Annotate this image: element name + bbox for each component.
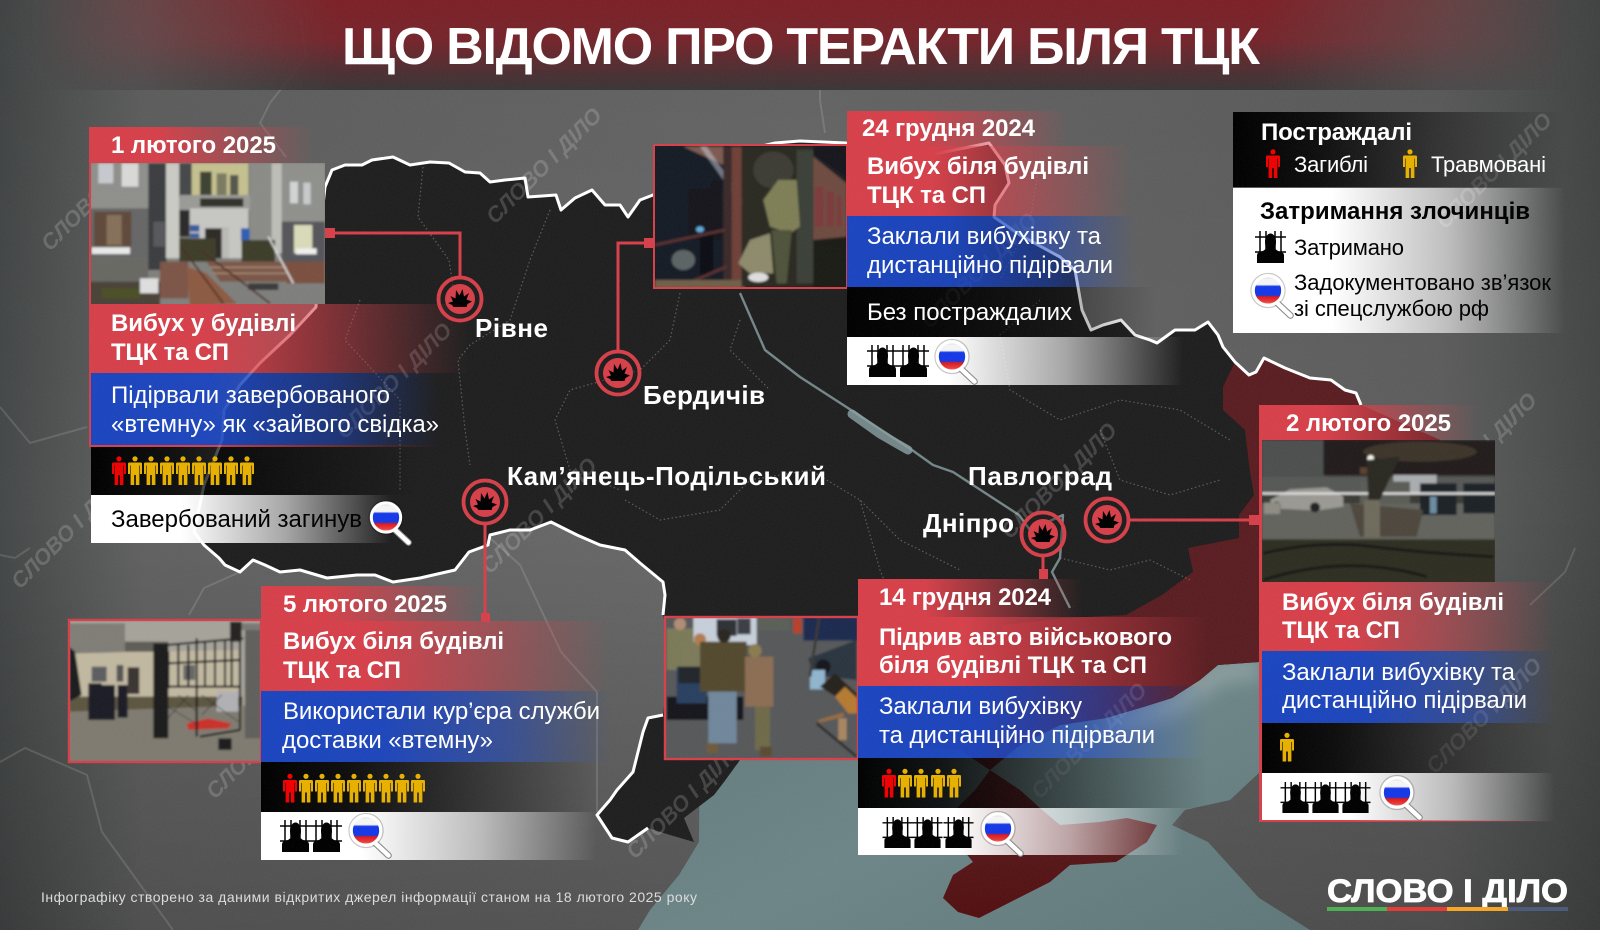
- watermarks: СЛОВО І ДІЛО: [1416, 388, 1542, 514]
- title: ЩО ВІДОМО ПРО ТЕРАКТИ БІЛЯ ТЦК: [342, 18, 1260, 76]
- legend item: injured: [1403, 149, 1546, 178]
- icon: Russia link magnifier: [935, 339, 974, 382]
- casualties: 1 killed, 4 injured: [882, 769, 961, 798]
- headline: [867, 153, 1089, 209]
- legend item: Russia link: Задокументовано зв’язок: [1294, 270, 1551, 295]
- watermarks: СЛОВО І ДІЛО: [916, 208, 1042, 334]
- headline: Вибух біля будівлі: [283, 628, 504, 655]
- casualties: 1 injured: [1280, 733, 1294, 762]
- casualties text: Без постраждалих: [867, 299, 1072, 326]
- headline: [879, 624, 1172, 679]
- marker: Berdychiv: [596, 352, 765, 410]
- Crimea: [930, 770, 1157, 918]
- panel: 1 February 2025 Rivne: [89, 127, 469, 543]
- label: Kamianets-Podilskyi: Кам’янець-Подільський: [507, 461, 826, 491]
- watermarks: СЛОВО І ДІЛО: [1421, 653, 1547, 779]
- method: «втемну» як «зайвого свідка»: [111, 411, 439, 438]
- method: Заклали вибухівку та: [867, 223, 1102, 250]
- leader end squares: [325, 228, 1260, 622]
- legend item: detained: Затримано: [1294, 235, 1404, 260]
- headline: Вибух біля будівлі: [1282, 589, 1504, 616]
- label: Dnipro: Дніпро: [923, 508, 1014, 538]
- headline: Вибух у будівлі: [111, 310, 296, 337]
- legend item: killed: [1266, 149, 1368, 178]
- headline: [283, 628, 504, 684]
- headline: ТЦК та СП: [867, 182, 986, 209]
- watermarks: СЛОВО І ДІЛО: [36, 130, 162, 256]
- label: Rivne: Рівне: [475, 313, 548, 343]
- method: Використали кур’єра служби: [283, 698, 600, 725]
- photo: investigators at the scene: [655, 146, 846, 287]
- panel: 14 December 2024 Dnipro: [660, 579, 1208, 855]
- headline: Підрив авто військового: [879, 624, 1172, 651]
- panel: 2 February 2025 Pavlohrad: [1259, 405, 1555, 822]
- legend item: killed: Загиблі: [1294, 152, 1368, 177]
- headline: ТЦК та СП: [111, 339, 229, 366]
- marker: Rivne: [438, 278, 548, 343]
- method: [282, 698, 600, 754]
- date: 24 грудня 2024: [862, 115, 1036, 142]
- headline: Вибух біля будівлі: [867, 153, 1089, 180]
- method: [879, 693, 1155, 749]
- legend item: Russia link: зі спецслужбою рф: [1294, 296, 1489, 321]
- watermarks: СЛОВО І ДІЛО: [481, 103, 607, 229]
- legend item: injured: Травмовані: [1431, 152, 1546, 177]
- icon: 2 detained: [280, 820, 342, 852]
- legend item: Russia link: [1251, 270, 1551, 321]
- outcome text: Завербований загинув: [111, 506, 362, 533]
- date: 1 лютого 2025: [111, 132, 276, 159]
- legend: [1233, 112, 1565, 333]
- icon: Russia link magnifier: [349, 813, 388, 856]
- label: Pavlohrad: Павлоград: [968, 461, 1112, 491]
- watermarks: СЛОВО І ДІЛО: [331, 318, 457, 444]
- method: дистанційно підірвали: [1282, 687, 1527, 714]
- method: Заклали вибухівку: [879, 693, 1082, 720]
- date: 2 лютого 2025: [1286, 410, 1451, 437]
- panel: 5 February 2025 Kamianets-Podilskyi: [65, 586, 612, 860]
- icon: 3 detained: [882, 817, 974, 848]
- method: Заклали вибухівку та: [1282, 659, 1516, 686]
- legend heading: victims: Постраждалі: [1261, 119, 1412, 146]
- icon: 2 detained: [867, 345, 929, 377]
- watermarks: СЛОВО І ДІЛО: [1431, 108, 1557, 234]
- occupied territories: [892, 358, 1480, 770]
- watermarks: [6, 103, 1557, 864]
- river Dnipro: [740, 293, 1070, 608]
- leader lines: [330, 233, 1252, 618]
- date: 5 лютого 2025: [283, 591, 447, 618]
- legend item: detained: [1255, 231, 1404, 263]
- source note: Інфографіку створено за даними відкритих джерел інформації станом на 18 лютого 2025 року: [41, 889, 697, 905]
- watermarks: СЛОВО І ДІЛО: [476, 453, 602, 579]
- method: доставки «втемну»: [282, 727, 493, 754]
- watermarks: СЛОВО І ДІЛО: [6, 468, 132, 594]
- headline: ТЦК та СП: [283, 657, 401, 684]
- title banner: [30, 0, 1570, 90]
- icon: 3 detained: [1280, 782, 1371, 813]
- method: Підірвали завербованого: [111, 382, 390, 409]
- icon: Russia link magnifier: [1380, 775, 1420, 818]
- casualties: 1 killed, 8 injured: [112, 456, 254, 485]
- method: [1282, 659, 1527, 714]
- watermarks: СЛОВО І ДІЛО: [996, 418, 1122, 544]
- headline: біля будівлі ТЦК та СП: [879, 652, 1147, 679]
- marker: Pavlohrad: [968, 461, 1128, 542]
- photo: night scene with police tape: [1260, 440, 1500, 585]
- method: [111, 382, 439, 438]
- method: та дистанційно підірвали: [879, 722, 1155, 749]
- panel: 24 December 2024 Berdychiv: [650, 111, 1183, 385]
- legend heading: detention: Затримання злочинців: [1260, 198, 1530, 225]
- photo: damaged gate: [70, 621, 260, 761]
- watermarks: СЛОВО І ДІЛО: [621, 738, 747, 864]
- watermarks: СЛОВО І ДІЛО: [201, 678, 327, 804]
- headline: ТЦК та СП: [1282, 617, 1400, 644]
- photo: people at the car explosion: [666, 618, 857, 758]
- logo: СЛОВО І ДІЛО: [1327, 873, 1568, 909]
- photo: damaged TCC building: [90, 160, 330, 307]
- marker: Kamianets-Podilskyi: [464, 461, 826, 524]
- date: 14 грудня 2024: [879, 584, 1052, 611]
- headline: [1282, 589, 1504, 644]
- watermarks: СЛОВО І ДІЛО: [1026, 678, 1152, 804]
- icon: Russia link magnifier: [369, 500, 408, 542]
- marker: Dnipro: [923, 508, 1064, 556]
- headline: [111, 310, 296, 366]
- method: [867, 223, 1113, 279]
- icon: Russia link magnifier: [981, 811, 1020, 854]
- label: Berdychiv: Бердичів: [643, 380, 765, 410]
- map of Ukraine: [194, 141, 1480, 918]
- method: дистанційно підірвали: [867, 252, 1113, 279]
- casualties: 1 killed, 8 injured: [283, 774, 425, 802]
